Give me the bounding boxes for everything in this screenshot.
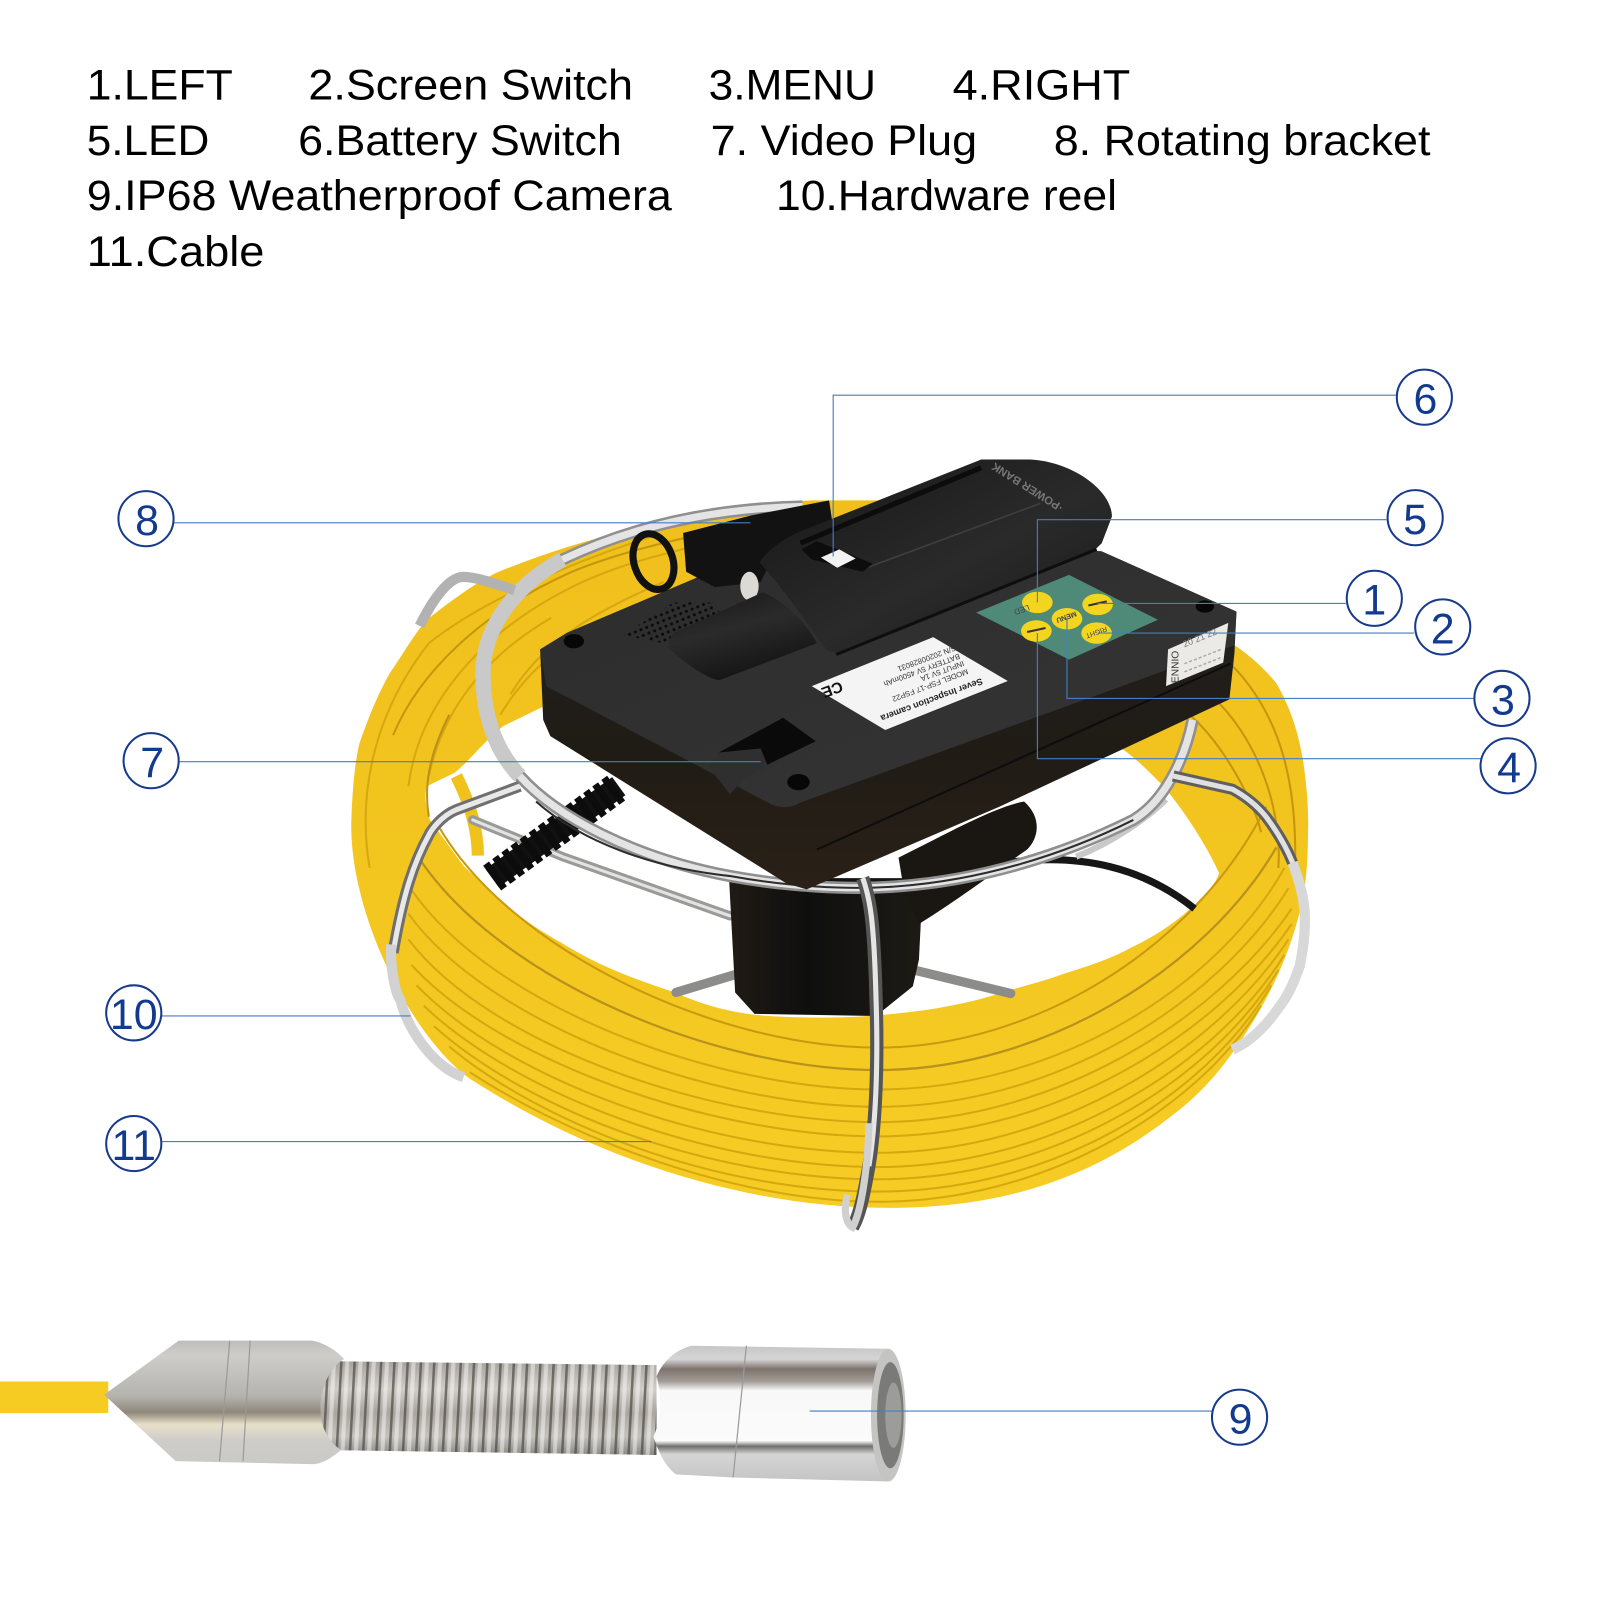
callout 8: 8 — [135, 497, 159, 545]
battery switch slot — [802, 541, 873, 572]
video plug — [709, 748, 768, 794]
button menu: MENU — [1055, 609, 1078, 624]
date sticker: 20 21 22 — [1181, 627, 1218, 649]
button LED: LED — [1013, 603, 1031, 617]
legend: 9.IP68 Weatherproof Camera: 9.IP68 Weatherproof Camera — [87, 172, 672, 220]
callout 5 — [1388, 490, 1443, 545]
black dome — [899, 802, 1037, 924]
legend: 11.Cable: 11.Cable — [87, 228, 264, 276]
button right — [1081, 622, 1112, 644]
legend: 1.LEFT: 1.LEFT — [87, 61, 233, 109]
button menu — [1052, 608, 1082, 629]
coiled cord — [492, 786, 619, 878]
label input line: INPUT 5V 1A — [918, 659, 965, 684]
screws — [564, 600, 1214, 790]
left arch — [391, 786, 520, 1077]
callout 3 — [1474, 671, 1530, 726]
callout 1: 1 — [1362, 577, 1386, 625]
rear ferrule — [104, 1341, 344, 1464]
camera head assembly — [0, 1341, 909, 1482]
date sticker: ENNIO — [1170, 651, 1181, 683]
reel assembly — [351, 500, 1308, 1208]
callout 4 — [1481, 738, 1536, 793]
label serial line: S/N 20200828031 — [896, 643, 957, 673]
front housing — [653, 1346, 909, 1482]
front chrome arches — [391, 776, 1305, 1227]
button LED — [1013, 592, 1053, 617]
legend text block — [87, 61, 1431, 276]
box top face — [540, 531, 1236, 807]
small battery cylinder — [668, 592, 817, 680]
green panel — [976, 575, 1158, 660]
legend: 3.MENU: 3.MENU — [709, 61, 876, 109]
legend: 6.Battery Switch: 6.Battery Switch — [298, 117, 622, 165]
callout 4: 4 — [1497, 744, 1521, 792]
callout 11: 11 — [111, 1122, 156, 1170]
black video cable — [1006, 860, 1195, 909]
yellow cable coil — [351, 500, 1308, 1208]
center arch — [845, 878, 877, 1227]
callout 7: 7 — [140, 739, 164, 787]
power bank battery — [760, 459, 1112, 653]
callout 8 — [118, 491, 174, 546]
legend: 7. Video Plug: 7. Video Plug — [711, 117, 977, 165]
button screen switch — [1082, 594, 1113, 615]
box body silhouette — [540, 531, 1236, 889]
callout leader lines — [161, 395, 1481, 1411]
callout 7 — [124, 733, 179, 788]
legend: 2.Screen Switch: 2.Screen Switch — [308, 61, 633, 109]
callout 9 — [1212, 1390, 1267, 1445]
callout 6 — [1397, 370, 1452, 425]
battery switch — [821, 549, 856, 568]
power bank print: ·POWER BANK — [990, 460, 1066, 513]
top-left chrome arch — [420, 577, 515, 626]
callout 2 — [1415, 599, 1470, 654]
chrome spokes — [473, 820, 1011, 993]
button left — [1021, 620, 1052, 642]
callout 3: 3 — [1491, 677, 1515, 725]
date sticker — [1166, 623, 1228, 686]
white knob — [740, 572, 759, 600]
lens — [871, 1349, 906, 1482]
rear bracket clip — [683, 500, 832, 587]
video plug recess — [719, 718, 816, 768]
legend: 4.RIGHT: 4.RIGHT — [953, 61, 1130, 109]
metal spring hose — [316, 1361, 657, 1455]
white spec label — [812, 637, 1008, 730]
strap loop — [626, 528, 681, 595]
callout 10: 10 — [110, 991, 158, 1039]
keypad — [976, 575, 1158, 660]
label lines: Sever Inspection camera — [878, 676, 984, 724]
callout 1 — [1347, 571, 1402, 626]
callout 9: 9 — [1229, 1396, 1253, 1444]
numbered callouts — [106, 370, 1536, 1445]
button right: RIGHT — [1084, 624, 1108, 640]
legend: 8. Rotating bracket: 8. Rotating bracket — [1054, 117, 1431, 165]
legend: 10.Hardware reel: 10.Hardware reel — [776, 172, 1117, 220]
right arch — [1173, 776, 1305, 1050]
black pivot stem — [729, 878, 923, 1016]
yellow cable stub — [0, 1381, 108, 1413]
callout 6: 6 — [1413, 376, 1437, 424]
label model line: MODEL FSP-17 FSP22 — [891, 667, 969, 704]
speaker grille — [623, 602, 720, 643]
label battery line: BATTERY 5V 4500mAh — [882, 652, 961, 688]
callout 2: 2 — [1431, 605, 1455, 653]
CE mark: CE — [819, 677, 845, 701]
callout 5: 5 — [1403, 496, 1427, 544]
chrome ring — [483, 506, 1193, 888]
camera control box — [540, 459, 1236, 889]
legend: 5.LED: 5.LED — [87, 117, 209, 165]
